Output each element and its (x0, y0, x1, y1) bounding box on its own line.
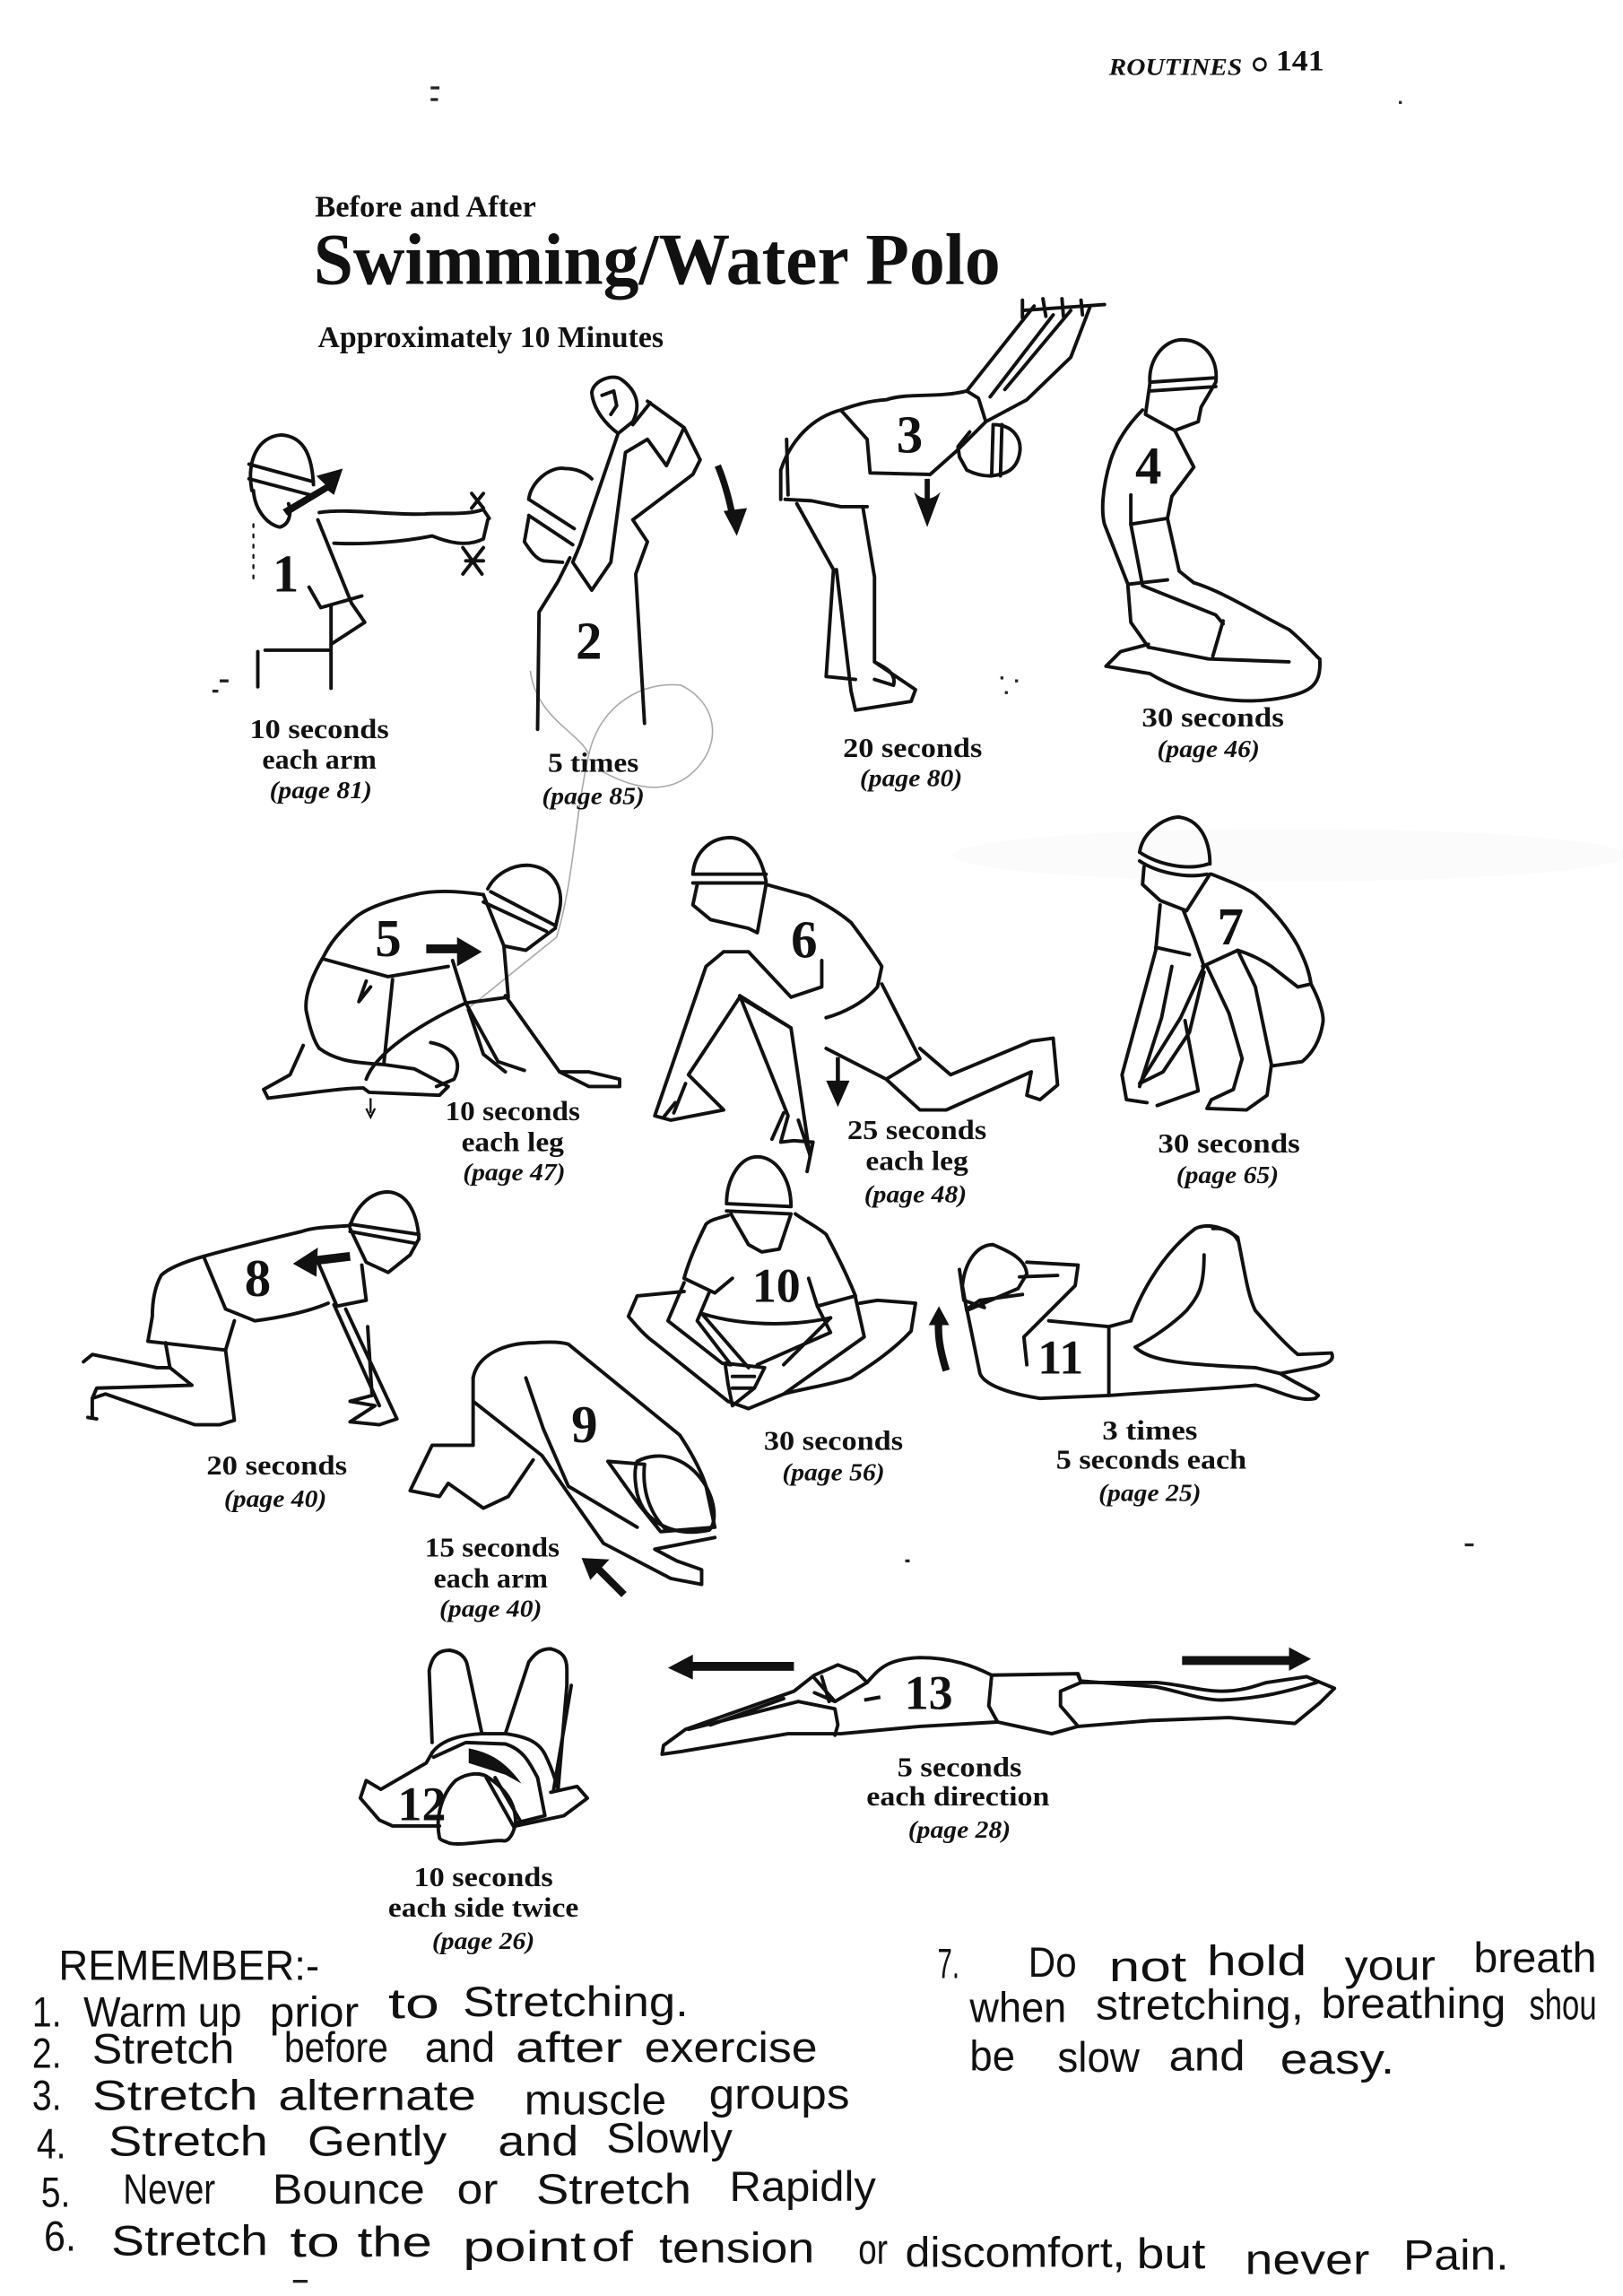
note 1: to (388, 1980, 439, 2028)
small arrow 5 (366, 1098, 375, 1118)
label 10: 30 seconds (764, 1424, 903, 1456)
note 3: 3. (32, 2073, 62, 2120)
exercise 5 (264, 865, 620, 1187)
note 4: Stretch (108, 2118, 268, 2165)
note 6: tension (659, 2224, 814, 2272)
note 2: and (425, 2024, 495, 2072)
note 7: easy. (1280, 2036, 1394, 2083)
label 8 (206, 1449, 347, 1513)
note 6: never (1245, 2237, 1369, 2284)
handwritten notes (32, 1935, 1597, 2284)
number 5: 5 (375, 909, 402, 968)
note 4 (37, 2115, 733, 2169)
title block (314, 190, 1001, 354)
note 3: muscle (525, 2077, 666, 2125)
exercise 7 (1122, 817, 1324, 1189)
figure 4 drawing (1103, 340, 1320, 700)
arrow 3 (914, 479, 941, 527)
label 12: 10 seconds (413, 1861, 553, 1892)
note 6: the (358, 2219, 432, 2266)
figure 7 drawing (1122, 817, 1324, 1110)
note 1: prior (270, 1989, 359, 2037)
note 5: Stretch (536, 2166, 691, 2213)
label 3 (843, 732, 982, 793)
label 5: 10 seconds (446, 1095, 580, 1126)
exercise 8 (83, 1192, 419, 1513)
arrow 8 (293, 1248, 350, 1277)
note 1: 1. (32, 1989, 62, 2037)
note 7: breathing (1321, 1980, 1506, 2028)
figure 5 drawing (264, 865, 620, 1098)
page header: ROUTINES 141: 141 (1276, 45, 1324, 77)
exercise 11 (929, 1226, 1332, 1507)
number 7: 7 (1218, 898, 1244, 956)
note 5 (41, 2163, 876, 2216)
label 8: 20 seconds (206, 1449, 347, 1481)
label 7: (page 65) (1176, 1161, 1279, 1189)
note 6: but (1137, 2231, 1205, 2278)
label 1: 10 seconds (250, 713, 389, 744)
exercise 9 (410, 1342, 715, 1622)
note 5: or (457, 2166, 498, 2213)
note 4: Slowly (606, 2115, 733, 2162)
note 5: Bounce (273, 2166, 425, 2213)
exercise 1 (249, 435, 490, 804)
note 7: breath (1473, 1935, 1597, 1982)
arrow 1 (282, 468, 343, 516)
label 7: 30 seconds (1158, 1127, 1300, 1159)
arrow 11 (929, 1306, 950, 1370)
label 6: (page 48) (864, 1180, 967, 1208)
note 7 (937, 1935, 1597, 2083)
note 7: Do (1028, 1939, 1077, 1987)
label 11: 3 times (1102, 1414, 1197, 1446)
note 7: hold (1207, 1937, 1306, 1985)
note 3: Stretch (92, 2073, 258, 2120)
note 7: shou (1529, 1981, 1597, 2029)
title block: Approximately 10 Minutes (317, 320, 664, 354)
note 6: to (290, 2219, 340, 2266)
label 7 (1158, 1127, 1300, 1189)
note 1: Stretching. (463, 1979, 689, 2026)
label 3: (page 80) (860, 765, 962, 793)
note 7: your (1345, 1942, 1436, 1989)
number 9: 9 (571, 1396, 597, 1454)
label 9: (page 40) (439, 1595, 542, 1622)
note 7: 7. (937, 1941, 959, 1988)
number 6: 6 (791, 911, 818, 970)
label 5 (446, 1095, 580, 1187)
number 13 (864, 1665, 953, 1719)
number 4: 4 (1135, 437, 1161, 495)
label 4 (1141, 701, 1284, 763)
note 6: point (463, 2223, 586, 2271)
figure 8 drawing (83, 1192, 419, 1425)
label 13: 5 seconds (898, 1751, 1021, 1782)
exercise 2 (525, 378, 747, 810)
label 9 (425, 1532, 560, 1622)
number 11: 11 (1037, 1330, 1083, 1384)
note 7: and (1169, 2033, 1245, 2081)
note 2: Stretch (92, 2025, 234, 2073)
label 11 (1056, 1414, 1246, 1507)
title block: Swimming/Water Polo (314, 219, 1001, 300)
note 2 (32, 2024, 818, 2077)
note 7: when (968, 1985, 1066, 2032)
note 1 (32, 1979, 689, 2037)
label 12: (page 26) (432, 1927, 534, 1955)
arrow 6 (826, 1057, 849, 1107)
heading: remember: REMEMBER:- (58, 1942, 319, 1989)
arrow 9 (582, 1558, 624, 1595)
note 7: not (1109, 1944, 1186, 1991)
label 11: 5 seconds each (1056, 1444, 1246, 1475)
number 12: 12 (398, 1777, 446, 1831)
note 4: 4. (37, 2121, 66, 2169)
label 1: (page 81) (270, 777, 372, 804)
exercise 4 (1103, 340, 1320, 763)
note 3: alternate (278, 2073, 476, 2120)
note 5: Rapidly (730, 2163, 876, 2211)
number 3: 3 (897, 406, 923, 464)
label 2 (542, 746, 645, 810)
arrow 2 (717, 465, 747, 536)
arrow 13 left (668, 1655, 794, 1680)
label 12 (388, 1861, 578, 1955)
figure 2 drawing (525, 378, 700, 729)
figure 13 drawing (662, 1657, 1334, 1754)
note 7: be (969, 2033, 1015, 2081)
label 10 (764, 1424, 903, 1487)
note 6: 6. (44, 2213, 76, 2260)
label 6: 25 seconds (847, 1114, 986, 1145)
label 6 (847, 1114, 986, 1208)
figure 1 drawing (249, 435, 490, 688)
note 2: 2. (32, 2030, 62, 2077)
number 10: 10 (752, 1258, 801, 1312)
figure 12 drawing (360, 1648, 587, 1844)
label 8: (page 40) (224, 1485, 326, 1513)
label 10: (page 56) (782, 1459, 885, 1487)
note 1: Warm up (83, 1989, 242, 2037)
note 3 (32, 2071, 849, 2125)
note 2: after (516, 2024, 622, 2072)
exercise 10 (629, 1157, 916, 1487)
number 2: 2 (576, 613, 602, 671)
label 2: 5 times (548, 746, 638, 778)
label 6: each leg (865, 1144, 968, 1176)
note 5: 5. (41, 2169, 70, 2216)
arrow 12 (469, 1748, 522, 1784)
label 3: 20 seconds (843, 732, 982, 763)
figure 3 drawing (781, 299, 1105, 710)
label 13: (page 28) (908, 1816, 1011, 1844)
label 9: each arm (434, 1562, 548, 1594)
label 13 (866, 1751, 1049, 1844)
label 12: each side twice (388, 1892, 578, 1923)
label 4: (page 46) (1158, 735, 1260, 763)
label 13: each direction (866, 1780, 1049, 1812)
stray pencil scribble (465, 671, 713, 1011)
exercise 12 (360, 1648, 587, 1955)
exercise 13 (662, 1648, 1334, 1844)
note 7: slow (1057, 2034, 1141, 2082)
note 6: or (858, 2226, 888, 2274)
title block: Before and After (315, 190, 536, 224)
number 13: 13 (905, 1665, 953, 1719)
label 4: 30 seconds (1141, 701, 1284, 733)
exercise 6 (655, 838, 1057, 1208)
note 4: Gently (308, 2118, 447, 2165)
note 6: Stretch (111, 2217, 268, 2265)
number 8: 8 (245, 1249, 271, 1308)
page header: ROUTINES 141 (1107, 45, 1324, 80)
note 6: Pain. (1403, 2232, 1509, 2280)
note 4: and (498, 2118, 578, 2165)
label 2: (page 85) (542, 782, 645, 810)
arrow 5 (426, 937, 482, 967)
label 1 (250, 713, 389, 804)
exercise 3 (781, 299, 1105, 793)
label 5: each leg (462, 1126, 564, 1157)
arrow 13 right (1182, 1648, 1311, 1671)
note 5: Never (123, 2166, 215, 2213)
note 6: of (592, 2223, 634, 2271)
label 5: (page 47) (463, 1159, 566, 1187)
note 6 (44, 2213, 1509, 2284)
label 11: (page 25) (1098, 1479, 1202, 1507)
number 1: 1 (273, 545, 299, 604)
page header: ROUTINES 141: ROUTINES (1107, 54, 1242, 80)
figure 10 drawing (629, 1157, 916, 1409)
note 6: discomfort, (906, 2229, 1125, 2276)
label 1: each arm (262, 744, 377, 775)
note 7: stretching, (1096, 1981, 1304, 2029)
figure 9 drawing (410, 1342, 715, 1585)
note 2: exercise (645, 2024, 818, 2072)
figure 11 drawing (959, 1226, 1332, 1399)
figure 6 drawing (655, 838, 1057, 1171)
note 3: groups (709, 2071, 849, 2118)
label 9: 15 seconds (425, 1532, 560, 1563)
note 2: before (284, 2024, 388, 2072)
